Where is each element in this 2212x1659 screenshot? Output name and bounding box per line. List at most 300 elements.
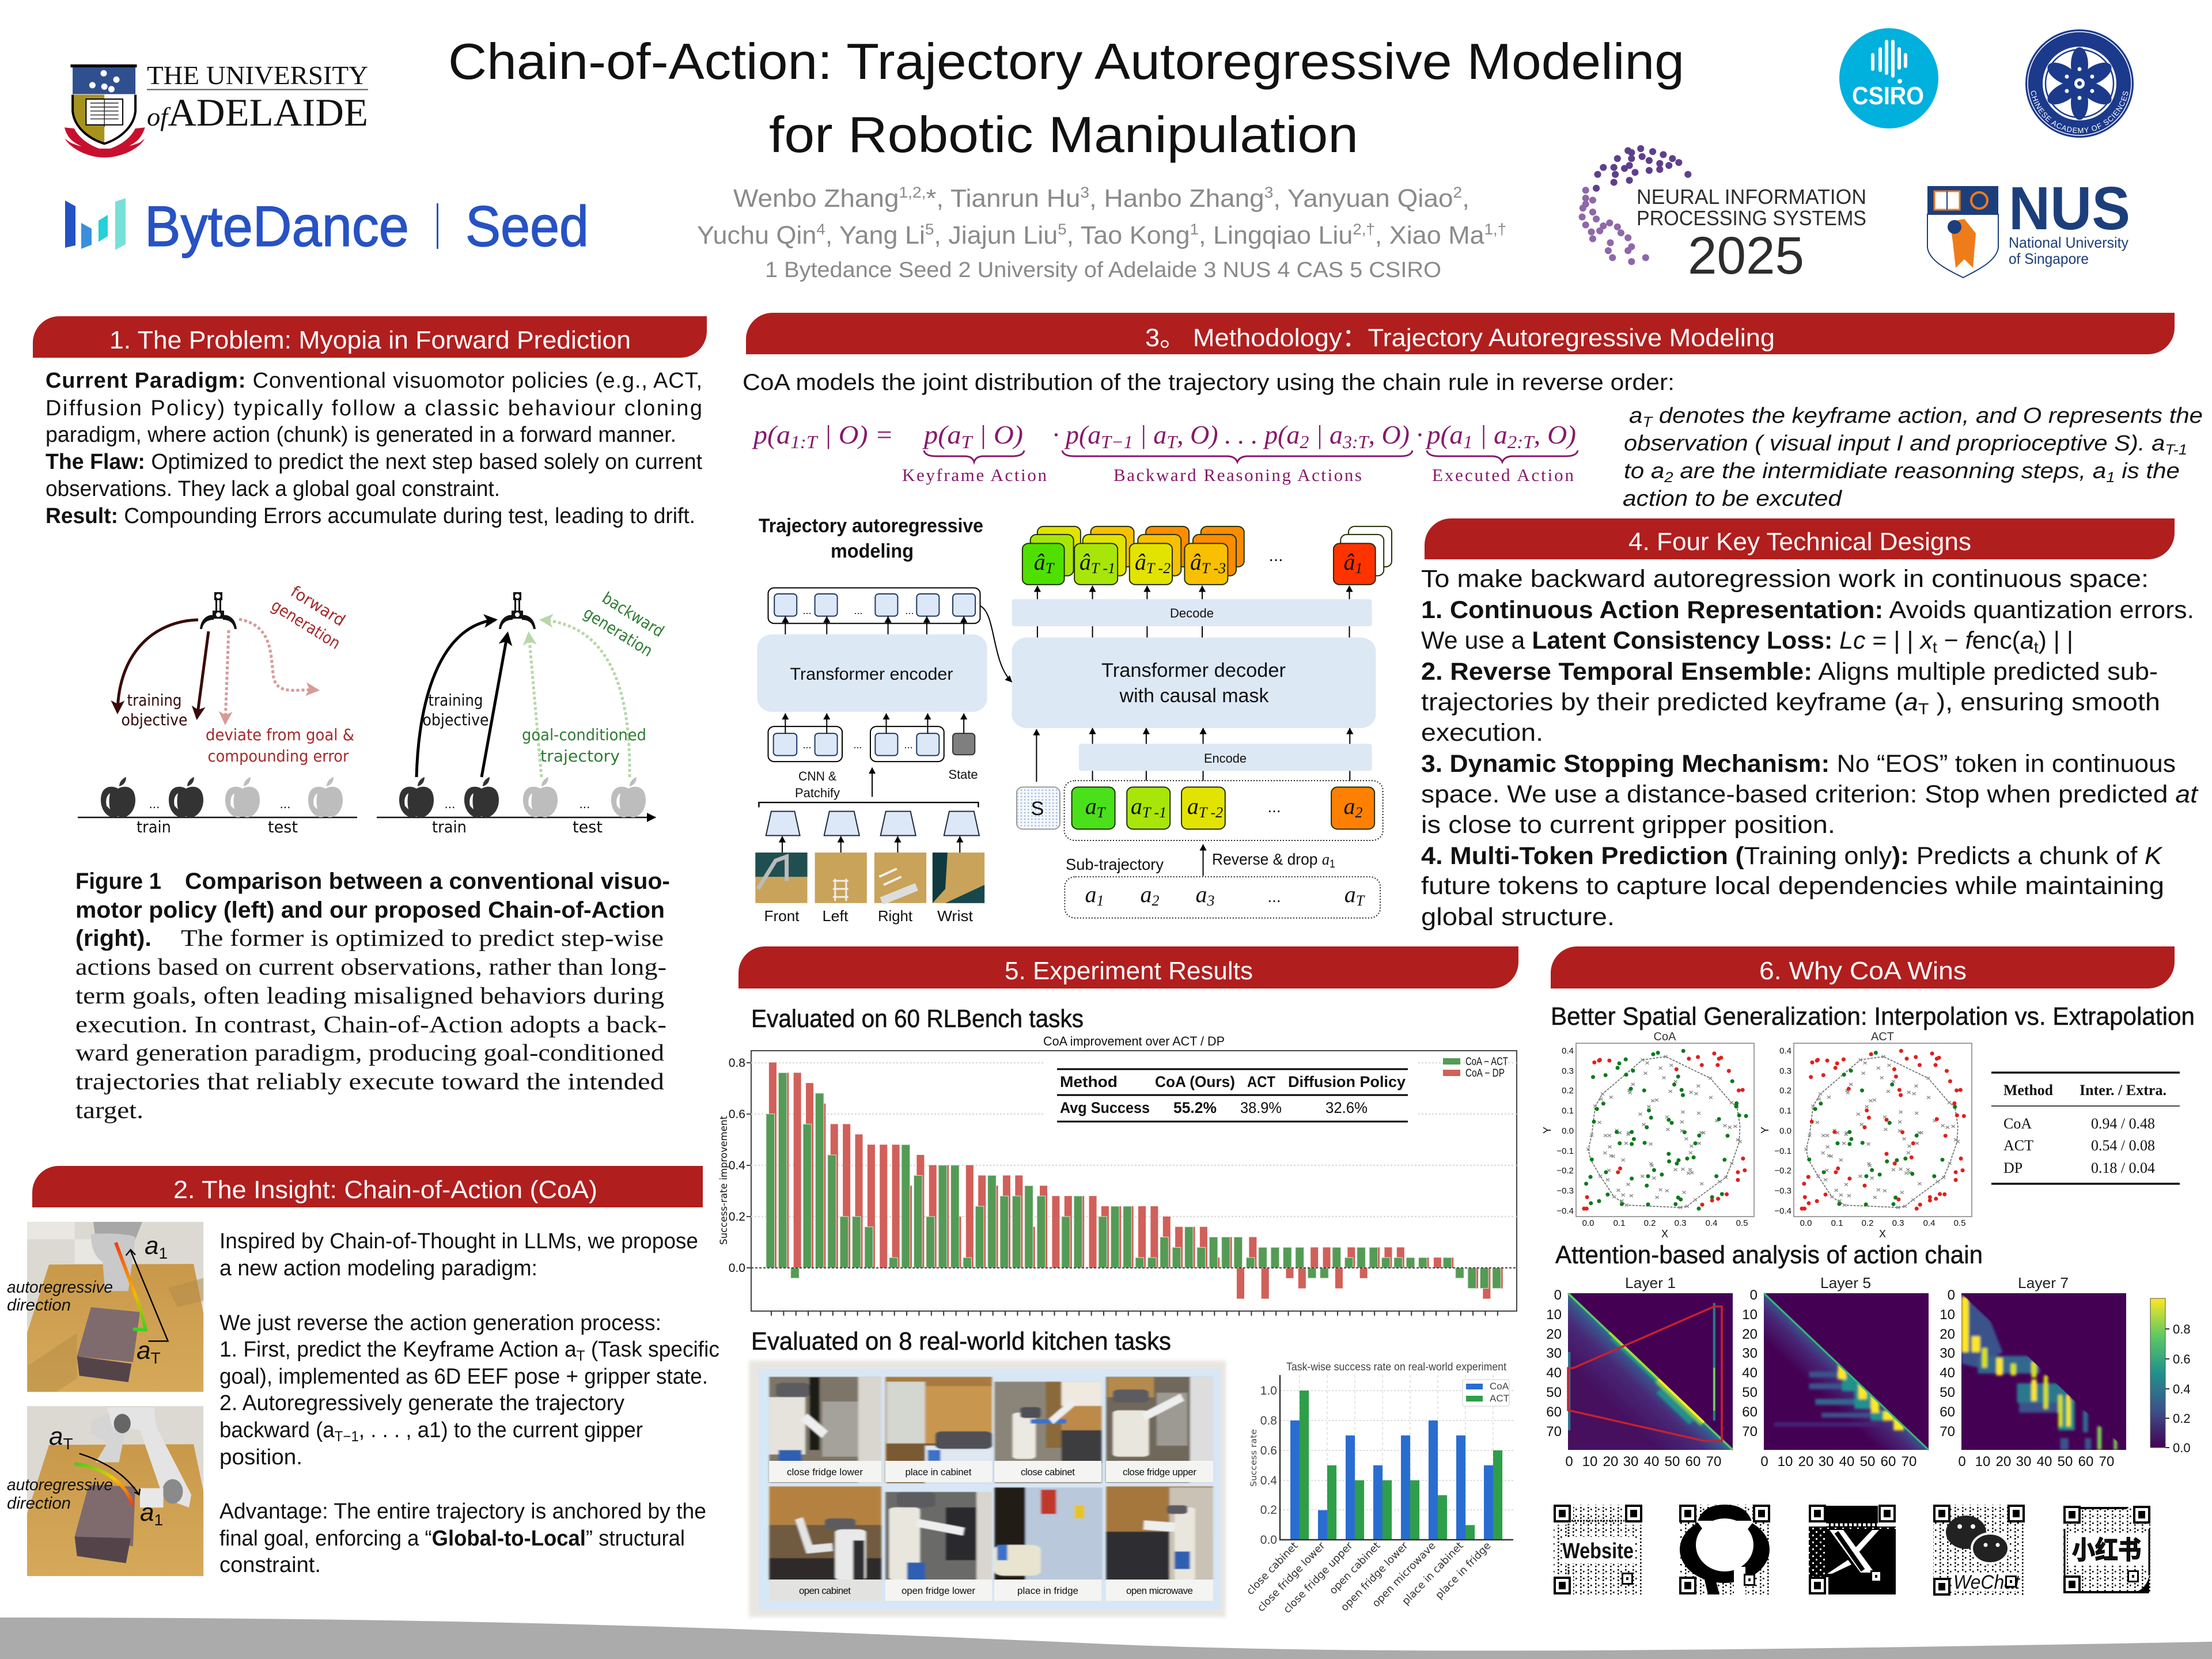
- formula: | a: [1133, 420, 1166, 449]
- heading: section 6: [1551, 946, 2175, 988]
- heatmap: layer 7: 10: [1940, 1307, 1955, 1323]
- subheading: kitchen tasks: Evaluated on 8 real-world kitchen tasks: [751, 1327, 1171, 1355]
- text block: insight description: We just reverse the action generation process:: [219, 1311, 661, 1335]
- QR code: Xiaohongshu: 小红书: [2072, 1536, 2141, 1565]
- colored action cards top: [1022, 527, 1392, 585]
- photo grid: kitchen tasks: place in fridge: [1017, 1585, 1078, 1596]
- table: average success: Diffusion Policy: [1288, 1073, 1406, 1090]
- diagram: forward vs backward generation: [78, 582, 668, 836]
- math labels on cards: a: [1196, 881, 1207, 907]
- authors: 1,2,: [899, 184, 926, 201]
- scatter plot: CoA: 0.3: [1675, 1218, 1686, 1228]
- math labels on cards: T -1: [1142, 804, 1166, 821]
- table: inter / extra: [1991, 1073, 2180, 1184]
- text block: designs: T: [1918, 700, 1929, 718]
- QR code: WeChat: [1933, 1505, 2025, 1596]
- table: average success: Method: [1060, 1073, 1118, 1090]
- labels: test: [268, 817, 298, 836]
- cell 5: [769, 1486, 881, 1580]
- photo grid: kitchen tasks: close fridge lower: [787, 1467, 863, 1478]
- math labels on cards: a: [1343, 793, 1355, 819]
- table: inter / extra: 0.54 / 0.08: [2091, 1137, 2155, 1154]
- formula: · p(a: [1052, 420, 1101, 449]
- logo: Chinese Academy of Sciences: CHINESE ACADEMY OF SCIENCES: [2031, 91, 2128, 134]
- photo: robot trajectory top: a: [145, 1232, 158, 1260]
- text block: problem description: observations. They lack a global goal constraint.: [46, 477, 500, 501]
- heatmap: layer 5: 20: [1798, 1454, 1813, 1469]
- formula: | O): [972, 420, 1023, 449]
- bar chart: task-wise success rate: Success rate: [1249, 1429, 1259, 1487]
- scatter plot: CoA: −0.3: [1556, 1186, 1574, 1196]
- heatmap: layer 5: 30: [1819, 1454, 1834, 1469]
- heatmap: layer 5: [1742, 1274, 1929, 1469]
- labels: trajectory: [540, 747, 620, 766]
- scatter plot: ACT: X: [1879, 1228, 1886, 1240]
- cell 7: [994, 1487, 1103, 1580]
- heading: section 4: 4. Four Key Technical Designs: [1628, 528, 1971, 556]
- math labels on cards: T: [1356, 892, 1365, 909]
- diagram labels: ...: [1267, 798, 1281, 816]
- bar chart: task-wise success rate: [1244, 1361, 1513, 1616]
- photo: robot trajectory bottom: 1: [154, 1511, 163, 1529]
- formula: 1:T: [790, 431, 819, 452]
- bar chart: task-wise success rate: 0.8: [1260, 1414, 1277, 1427]
- token boxes: [768, 588, 980, 762]
- heatmap: layer 7: 10: [1975, 1454, 1990, 1469]
- text block: notation: 1: [2106, 469, 2115, 486]
- text block: designs: execution.: [1421, 719, 1543, 747]
- heatmap: layer 7: 40: [2037, 1454, 2052, 1469]
- scatter plot: ACT: 0.1: [1831, 1218, 1843, 1228]
- heading: section 1: [33, 316, 707, 358]
- caption strips: [769, 1461, 1213, 1601]
- diagram labels: State: [948, 767, 978, 782]
- photo: robot trajectory top: T: [150, 1349, 161, 1367]
- formula: 2:T: [1508, 431, 1535, 452]
- heatmap: layer 7: 70: [2099, 1454, 2114, 1469]
- table: average success: 55.2%: [1173, 1099, 1217, 1116]
- logo: NUS: [1927, 175, 2130, 278]
- heatmap: layer 1: 60: [1546, 1404, 1562, 1420]
- diagram labels: Transformer encoder: [790, 665, 953, 684]
- diagram labels: CNN &: [798, 769, 836, 783]
- text block: notation: to a: [1624, 459, 1660, 483]
- heatmap: layer 5: 40: [1839, 1454, 1854, 1469]
- heatmap: layer 1: 10: [1582, 1454, 1597, 1469]
- math labels on cards: T -2: [1199, 804, 1223, 821]
- formula: , O) . . . p(a: [1177, 420, 1300, 449]
- scatter plot: CoA: X: [1661, 1228, 1668, 1240]
- table: average success: 38.9%: [1240, 1099, 1282, 1116]
- panel: section 4 four key technical designs: [1421, 518, 2199, 931]
- text block: insight description: a new action modeling paradigm:: [219, 1256, 537, 1281]
- logo: Chinese Academy of Sciences: [2025, 29, 2134, 138]
- math labels on cards: T: [1046, 560, 1055, 577]
- bar chart: task-wise success rate: 0.6: [1260, 1444, 1277, 1457]
- formula: Backward Reasoning Actions: [1113, 465, 1362, 485]
- figure caption: (right).: [75, 926, 151, 951]
- labels: generation: [580, 603, 656, 661]
- authors: 1: [1190, 221, 1199, 238]
- figure caption: ward generation paradigm, producing goal-conditioned: [75, 1039, 664, 1066]
- labels: ...: [279, 797, 291, 811]
- heatmap: layer 7: 60: [2078, 1454, 2093, 1469]
- text block: insight description: , . . . , a1) to the current gipper: [359, 1418, 643, 1442]
- table: inter / extra: CoA: [2003, 1115, 2032, 1132]
- scatter plot: ACT: 0.4: [1779, 1046, 1791, 1056]
- y axis labels: 0.4: [729, 1159, 745, 1172]
- authors: 5: [925, 221, 934, 238]
- diagram shapes: [755, 527, 1392, 918]
- math labels on cards: T -1: [1091, 560, 1115, 577]
- text: intro sentence: CoA models the joint distribution of the trajectory using the chain rule in reverse order:: [743, 370, 1675, 395]
- labels: ...: [579, 797, 590, 811]
- heatmap: layer 7: 70: [1940, 1424, 1955, 1440]
- x labels: place in cabinet: [1400, 1540, 1466, 1607]
- photo: robot trajectory top: direction: [7, 1296, 71, 1315]
- x labels: open cabinet: [1327, 1540, 1383, 1597]
- scatter plot: ACT: −0.2: [1774, 1166, 1791, 1176]
- photo grid: kitchen tasks: place in cabinet: [906, 1467, 972, 1478]
- heatmap: layer 7: 40: [1940, 1365, 1955, 1381]
- scatter plot: ACT: −0.4: [1774, 1206, 1791, 1216]
- text block: designs: To make backward autoregression work in continuous space:: [1421, 565, 2149, 593]
- x labels: open fridge lower: [1339, 1539, 1411, 1613]
- authors: 2: [1453, 184, 1462, 201]
- x labels: open microwave: [1370, 1540, 1438, 1609]
- text block: designs: −: [1937, 627, 1965, 654]
- text block: designs: t: [2034, 638, 2039, 656]
- x labels: close cabinet: [1244, 1540, 1301, 1597]
- math labels on cards: a: [1344, 881, 1356, 907]
- diagram labels: S: [1031, 798, 1044, 820]
- colored action cards bottom: [1017, 787, 1374, 829]
- arrows: left panel: [118, 619, 317, 723]
- QR code: GitHub: [1679, 1505, 1770, 1594]
- heading: section 2: [32, 1166, 703, 1207]
- text block: notation: 2: [1664, 469, 1673, 486]
- QR code: WeChat: WeChat: [1953, 1571, 2020, 1593]
- text: of Adelaide: ofADELAIDE: [147, 90, 368, 134]
- text block: designs: ) | |: [2039, 627, 2073, 654]
- photo: robot trajectory bottom: autoregressive: [7, 1476, 113, 1494]
- labels: objective: [423, 710, 488, 729]
- logo: NeurIPS 2025: NEURAL INFORMATION: [1637, 185, 1866, 209]
- heatmap: layer 1: 0: [1565, 1454, 1573, 1469]
- timeline axes: [78, 817, 656, 818]
- bar chart: task-wise success rate: 0.0: [1260, 1533, 1277, 1547]
- labels: train: [432, 817, 467, 836]
- scatter plot: ACT: [1759, 1031, 1972, 1240]
- heading: section 3: [746, 313, 2175, 354]
- diagram labels: ...: [1267, 888, 1281, 906]
- dotted sequence frames: [1065, 781, 1383, 918]
- text block: notation: denotes the keyframe action, and O represents the: [1652, 404, 2203, 428]
- panel: section 6 why CoA wins: [1541, 946, 2195, 1596]
- labels: objective: [121, 710, 188, 729]
- text block: insight description: Advantage: The entire trajectory is anchored by the: [219, 1499, 706, 1524]
- x labels: close fridge lower: [1255, 1539, 1328, 1614]
- heading: section 2: 2. The Insight: Chain-of-Action (CoA): [173, 1176, 597, 1204]
- diagram labels: ...: [802, 739, 812, 751]
- figure caption: trajectories that reliably execute toward the intended: [75, 1068, 664, 1094]
- formula: T: [961, 431, 974, 452]
- photo: robot trajectory bottom: T: [63, 1435, 73, 1453]
- colorbar: 0.2: [2173, 1411, 2191, 1426]
- cell 1: [769, 1377, 881, 1483]
- bar chart: improvement over ACT and DP: [718, 1034, 1517, 1313]
- bar chart: improvement over ACT and DP: Success-rate improvement: [718, 1116, 730, 1245]
- text block: designs: [1421, 565, 2199, 931]
- subheading: RLBench: Evaluated on 60 RLBench tasks: [751, 1005, 1084, 1033]
- text block: designs: global structure.: [1421, 903, 1615, 931]
- arrows: right panel: [416, 620, 630, 777]
- table: average success: CoA (Ours): [1155, 1073, 1235, 1090]
- photo: robot trajectory bottom: a: [140, 1498, 154, 1527]
- formula: , O) ·: [1368, 420, 1423, 449]
- heatmap: layer 5: 50: [1742, 1385, 1758, 1400]
- bar chart: task-wise success rate: 0.4: [1260, 1474, 1277, 1487]
- scatter plot: ACT: Y: [1759, 1127, 1771, 1134]
- heading: section 6: 6. Why CoA Wins: [1759, 957, 1967, 985]
- logo: NeurIPS 2025: [1582, 149, 1866, 285]
- heatmap: layer 7: 30: [2016, 1454, 2031, 1469]
- diagram labels: ...: [1268, 546, 1283, 565]
- math labels on cards: a: [1141, 881, 1152, 907]
- text block: notation: action to be excuted: [1623, 487, 1843, 511]
- diagram labels: with causal mask: [1119, 685, 1269, 707]
- diagram labels: Sub-trajectory: [1066, 855, 1164, 873]
- photo: robot trajectory top: [7, 1222, 203, 1392]
- text block: insight description: backward (a: [219, 1418, 339, 1442]
- photo: robot trajectory top: a: [137, 1336, 150, 1365]
- photo grid: kitchen tasks: [749, 1361, 1226, 1617]
- ACT bars: [1300, 1391, 1502, 1540]
- heading: section 1: 1. The Problem: Myopia in Forward Prediction: [109, 326, 631, 354]
- table: average success: ACT: [1247, 1073, 1275, 1090]
- photo grid: kitchen tasks: open microwave: [1126, 1585, 1193, 1596]
- heatmap: layer 7: 50: [2058, 1454, 2073, 1469]
- apples: [101, 777, 646, 817]
- heatmap: layer 1: 40: [1644, 1454, 1659, 1469]
- photo: robot trajectory top: 1: [158, 1244, 168, 1262]
- figure caption: execution. In contrast, Chain-of-Action adopts a back-: [75, 1011, 666, 1037]
- heatmap: layer 7: 20: [1940, 1327, 1955, 1342]
- red bars: [769, 1062, 1503, 1298]
- panel: section 1 the problem: [33, 316, 707, 1123]
- heatmap: layer 5: 60: [1881, 1454, 1896, 1469]
- heading: section 5: 5. Experiment Results: [1005, 957, 1253, 985]
- table: inter / extra: 0.94 / 0.48: [2091, 1115, 2155, 1132]
- heatmap: layer 7: 60: [1940, 1404, 1955, 1420]
- scatter plot: CoA: [1541, 1031, 1754, 1240]
- diagram labels: Encode: [1204, 751, 1247, 766]
- heatmap: layer 5: 70: [1902, 1454, 1916, 1469]
- text block: insight description: Inspired by Chain-of-Thought in LLMs, we propose: [219, 1229, 698, 1253]
- formula: , O): [1533, 420, 1576, 449]
- formula: 2: [1300, 431, 1309, 452]
- text block: problem description: paradigm, where action (chunk) is generated in a forward manner.: [46, 423, 676, 447]
- scatter plot: ACT: 0.2: [1862, 1218, 1873, 1228]
- heatmap: layer 7: 30: [1940, 1346, 1955, 1361]
- text block: designs: t: [1933, 638, 1937, 656]
- CoA bars: [1290, 1421, 1493, 1540]
- diagram labels: 1: [1330, 858, 1335, 870]
- logo: CSIRO: CSIRO: [1852, 82, 1924, 110]
- labels: [121, 582, 668, 836]
- math labels on cards: a: [1085, 881, 1097, 907]
- authors: , Jiajun Liu: [934, 221, 1058, 249]
- text block: notation: [1623, 404, 2203, 511]
- text block: designs: future tokens to capture local dependencies while maintaining: [1421, 872, 2164, 900]
- heatmap: layer 5: 40: [1742, 1365, 1758, 1381]
- table: inter / extra: DP: [2003, 1160, 2022, 1176]
- heatmap: layer 1: 0: [1554, 1287, 1562, 1303]
- legend: ACT: [1490, 1393, 1509, 1404]
- table: average success: Avg Success: [1060, 1099, 1150, 1116]
- x labels: place in fridge: [1433, 1540, 1494, 1601]
- math labels on cards: â: [1080, 549, 1091, 575]
- logo: ByteDance Seed: ByteDance: [145, 194, 409, 258]
- photo grid: kitchen tasks: close cabinet: [1021, 1467, 1075, 1478]
- scatter plot: CoA: 0.0: [1562, 1126, 1574, 1136]
- math labels on cards: â: [1135, 549, 1146, 575]
- authors: , Yanyuan Qiao: [1273, 184, 1453, 213]
- authors: , Yang Li: [825, 221, 925, 249]
- math labels on cards: T -3: [1202, 560, 1226, 577]
- table: inter / extra: ACT: [2003, 1137, 2033, 1154]
- authors: , Tao Kong: [1067, 221, 1190, 249]
- scatter plot: ACT: −0.3: [1774, 1186, 1791, 1196]
- authors: , Xiao Ma: [1375, 221, 1484, 249]
- text block: notation: observation ( visual input I and proprioceptive S). a: [1624, 431, 2116, 456]
- table: average success: 32.6%: [1325, 1099, 1368, 1116]
- heatmap: layer 7: 0: [1958, 1454, 1966, 1469]
- authors: 5: [1058, 221, 1067, 238]
- bar chart: task-wise success rate: Task-wise success rate on real-world experiment: [1286, 1361, 1507, 1373]
- labels: goal-conditioned: [522, 725, 646, 744]
- logo: NeurIPS 2025: 2025: [1688, 226, 1804, 285]
- text block: designs: space. We use a distance-based criterion: Stop when predicted at: [1421, 781, 2199, 808]
- y axis labels: 0.0: [729, 1262, 745, 1275]
- heatmap: layer 5: 30: [1742, 1346, 1758, 1361]
- heatmap: layer 1: Layer 1: [1625, 1274, 1676, 1291]
- heatmap: layer 1: 60: [1685, 1454, 1700, 1469]
- heatmap: layer 1: 20: [1546, 1327, 1562, 1342]
- logo: ByteDance Seed: Seed: [465, 194, 589, 258]
- diagram labels: ...: [802, 605, 812, 616]
- green bars: [766, 1073, 1501, 1289]
- heatmap: layer 5: 0: [1750, 1287, 1758, 1303]
- math labels on cards: T -2: [1146, 560, 1171, 577]
- cell 8: [1106, 1486, 1213, 1580]
- text block: insight description: final goal, enforcing a “Global-to-Local” structural: [219, 1527, 685, 1551]
- diagram labels: ...: [904, 739, 913, 751]
- photo grid: kitchen tasks: open cabinet: [799, 1585, 851, 1596]
- scatter plot: ACT: 0.0: [1800, 1218, 1812, 1228]
- scatter plot: CoA: 0.1: [1562, 1106, 1574, 1116]
- y axis labels: 0.6: [729, 1108, 745, 1121]
- scatter plot: ACT: 0.2: [1779, 1086, 1791, 1096]
- text block: notation: are the intermidiate reasonning steps, a: [1673, 459, 2106, 483]
- heatmap: layer 5: 0: [1760, 1454, 1768, 1469]
- heading: section 3: 3。 Methodology：Trajectory Autoregressive Modeling: [1145, 324, 1775, 352]
- scatter plot: ACT: 0.4: [1923, 1218, 1935, 1228]
- figure caption: motor policy (left) and our proposed Chain-of-Action: [75, 897, 665, 923]
- table: average success: [1044, 1060, 1418, 1126]
- authors: 3: [1264, 184, 1273, 201]
- table: inter / extra: Method: [2003, 1082, 2054, 1099]
- diagram labels: modeling: [831, 540, 914, 562]
- authors: [697, 184, 1506, 282]
- diagram labels: Transformer decoder: [1101, 660, 1286, 681]
- formula: [752, 420, 1578, 485]
- photo: robot trajectory top: autoregressive: [7, 1278, 113, 1297]
- photo grid: kitchen tasks: open fridge lower: [902, 1585, 975, 1596]
- formula: T: [1166, 431, 1178, 452]
- logo: University of Adelaide: [65, 60, 368, 157]
- heatmap: layer 1: 70: [1706, 1454, 1721, 1469]
- colorbar: 0.4: [2173, 1382, 2191, 1396]
- text block: designs: 2. Reverse Temporal Ensemble: Aligns multiple predicted sub-: [1421, 658, 2158, 685]
- scatter plot: ACT: 0.1: [1779, 1106, 1791, 1116]
- diagram labels: ...: [854, 605, 863, 616]
- cell 2: [885, 1377, 992, 1483]
- figure caption: target.: [75, 1097, 143, 1123]
- authors: , Lingqiao Liu: [1199, 221, 1353, 249]
- authors: , Hanbo Zhang: [1089, 184, 1264, 213]
- scatter plot: CoA: 0.2: [1644, 1218, 1656, 1228]
- formula: | O) =: [817, 420, 893, 449]
- scatter plot: CoA: 0.5: [1736, 1218, 1748, 1228]
- diagram labels: Front: [764, 907, 800, 925]
- text block: problem description: The Flaw: Optimized to predict the next step based solely on current: [46, 450, 702, 474]
- photo grid: kitchen tasks: close fridge upper: [1123, 1467, 1196, 1478]
- authors: Yuchu Qin: [697, 221, 814, 249]
- y axis labels: [729, 1056, 745, 1275]
- labels: deviate from goal &: [206, 725, 354, 744]
- math labels on cards: 3: [1206, 892, 1214, 909]
- scatter plot: CoA: 0.0: [1582, 1218, 1594, 1228]
- panel: section 5 experiment results: [718, 946, 1518, 1617]
- diagram labels: [759, 515, 1335, 925]
- text block: notation: is the: [2115, 459, 2180, 483]
- scatter plot: CoA: CoA: [1654, 1031, 1676, 1043]
- figure caption: term goals, often leading misaligned behaviors during: [75, 982, 664, 1009]
- formula: Executed Action: [1432, 465, 1574, 485]
- math labels on cards: 2: [1152, 892, 1159, 909]
- photo: robot trajectory bottom: [7, 1406, 203, 1576]
- text block: designs: 3. Dynamic Stopping Mechanism: No “EOS” token in continuous: [1421, 750, 2176, 778]
- QR code: Xiaohongshu: [2063, 1506, 2150, 1593]
- text block: notation: a: [1629, 404, 1641, 428]
- labels: train: [137, 817, 171, 836]
- math labels on cards: a: [1187, 793, 1199, 819]
- subheading: attention analysis: Attention-based analysis of action chain: [1555, 1241, 1983, 1269]
- heatmap: layer 5: 20: [1742, 1327, 1758, 1342]
- trapezoids: [766, 811, 979, 836]
- labels: training: [429, 691, 483, 710]
- y axis labels: 0.2: [729, 1210, 745, 1224]
- heatmap: layer 5: 10: [1742, 1307, 1758, 1323]
- heatmap: layer 1: 50: [1546, 1385, 1562, 1400]
- diagram labels: ...: [905, 605, 914, 616]
- heading: section 4: [1425, 518, 2175, 559]
- scatter plot: CoA: Y: [1541, 1127, 1553, 1134]
- diagram labels: Reverse & drop a: [1212, 850, 1330, 869]
- scatter plot: CoA: 0.3: [1562, 1066, 1574, 1076]
- math labels on cards: T: [1097, 804, 1106, 821]
